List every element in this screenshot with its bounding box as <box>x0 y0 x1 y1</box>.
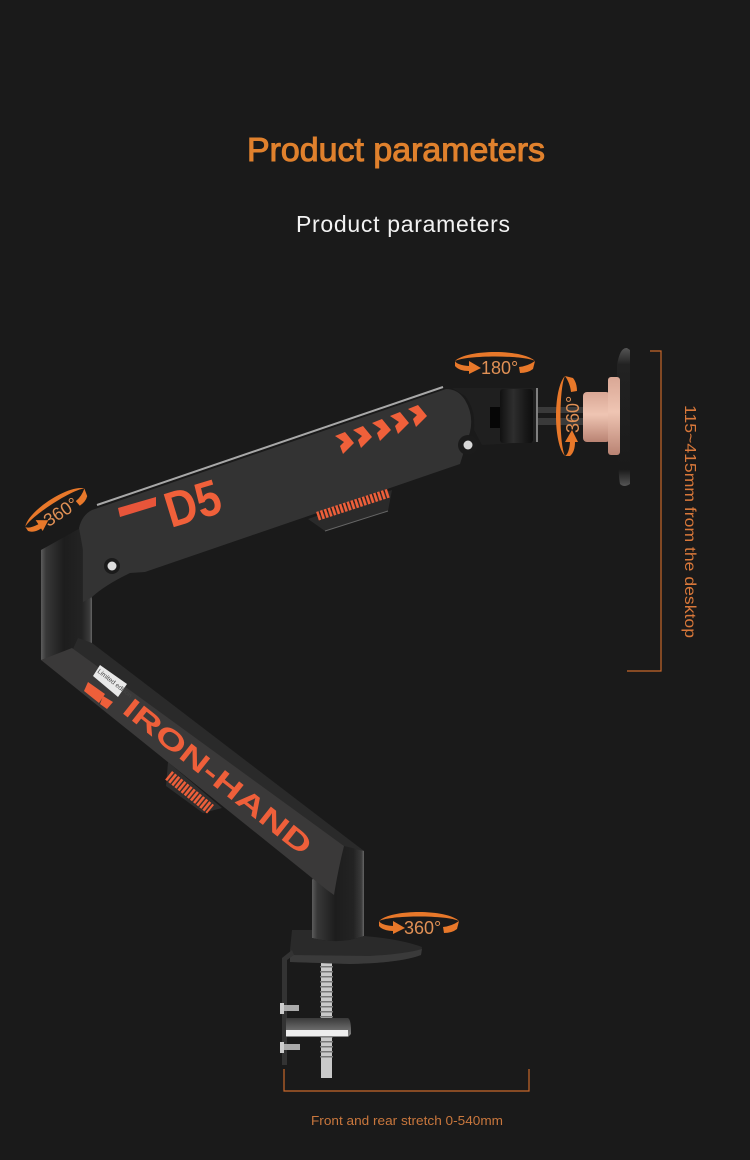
bolt: elbow <box>104 558 120 574</box>
stretch bracket <box>284 1069 529 1091</box>
monitor plate <box>617 348 630 486</box>
upper gas spring cover <box>308 490 392 531</box>
brand name: IRON-HAND <box>117 692 318 861</box>
arm face <box>41 648 344 895</box>
rotation icon: 360 left <box>20 481 94 541</box>
rotation icon: 360 vertical <box>556 376 583 456</box>
back plate <box>282 950 294 1065</box>
chevrons <box>335 405 427 454</box>
lower post <box>312 832 364 941</box>
title: Product parameters <box>247 131 545 168</box>
stretch label: Front and rear stretch 0-540mm <box>311 1114 503 1128</box>
rotation icon: 180 top: 180° <box>481 358 518 378</box>
arm body <box>79 389 471 602</box>
height bracket <box>627 351 661 671</box>
model bar <box>118 497 156 517</box>
rotation icon: 360 vertical: 360° <box>563 396 583 433</box>
connector rods <box>538 407 585 425</box>
lower arm tick marks <box>165 771 214 814</box>
rose gold knob <box>583 377 620 455</box>
upper bolt <box>280 1003 299 1014</box>
arm top strip <box>72 638 364 851</box>
lower bolt <box>280 1042 300 1053</box>
sticker <box>93 665 127 697</box>
height label: 115~415mm from the desktop <box>681 405 698 638</box>
rotation icon: 180 top <box>455 352 535 378</box>
lower gas spring cover <box>166 762 222 813</box>
red badge <box>84 682 113 709</box>
clamp <box>280 930 422 1078</box>
model number: D5 <box>158 469 228 539</box>
upper post <box>41 526 92 660</box>
pressure plate <box>286 1018 351 1037</box>
rotation icon: 360 base: 360° <box>404 918 441 938</box>
bolt: head <box>458 435 478 455</box>
base disc <box>290 930 422 964</box>
swivel joint <box>452 388 538 445</box>
upper arm tick marks <box>316 489 390 521</box>
threaded screw <box>321 963 332 1078</box>
monitor arm product <box>41 348 630 1078</box>
rotation icon: 360 left: 360° <box>40 494 82 531</box>
rotation icon: 360 base <box>379 912 459 938</box>
subtitle: Product parameters <box>296 211 510 237</box>
upper arm <box>79 387 471 602</box>
lower arm: Limited edition <box>96 668 133 700</box>
top edge highlight <box>97 387 443 505</box>
lower arm <box>41 638 364 895</box>
